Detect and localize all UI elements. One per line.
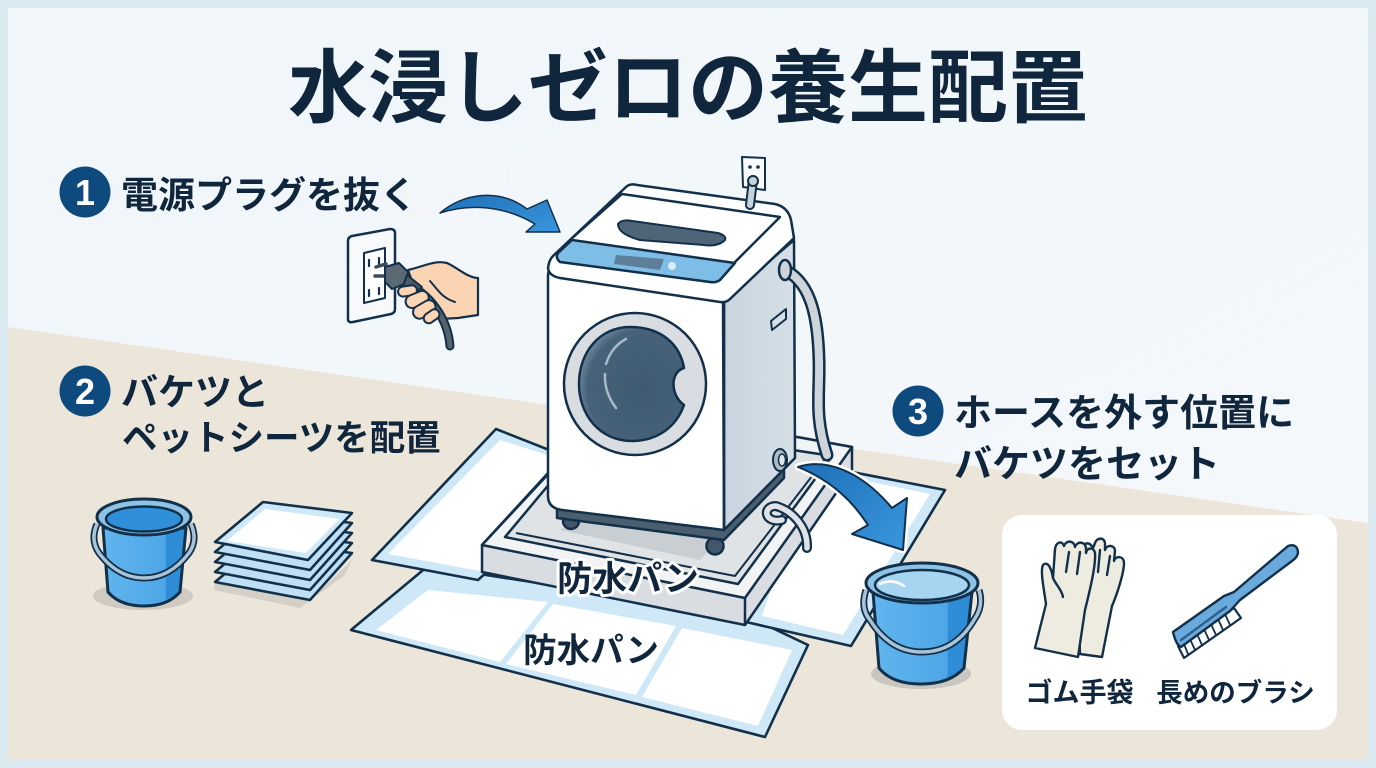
- step 2 label: バケツと: [121, 372, 269, 413]
- wall plug above washer: [742, 157, 765, 205]
- washer door: [564, 313, 706, 455]
- label: rubber gloves: ゴム手袋: [1026, 677, 1134, 708]
- step 2 label: ペットシーツを配置: [122, 418, 441, 458]
- waterproof pan: [482, 437, 852, 625]
- label: sheet: 防水パン: [523, 633, 659, 670]
- step 3 label: 3: [908, 391, 928, 432]
- step 1 label: 1: [75, 172, 95, 213]
- sheet: back left: [372, 429, 600, 580]
- drain outlet: [773, 449, 787, 471]
- step 2 label: [60, 366, 441, 458]
- loose hose: [767, 506, 807, 548]
- icon: stack of pet sheets: [214, 502, 352, 608]
- sheet: right: [746, 462, 945, 646]
- washer side panel: [724, 240, 795, 530]
- washer side vent: [771, 309, 786, 330]
- washer top: [548, 184, 794, 302]
- washer lid handle: [618, 220, 725, 245]
- arrow: hose to bucket: [798, 464, 907, 550]
- step 1 label: [60, 166, 417, 218]
- panel: tools: [1002, 515, 1337, 730]
- washer front panel: [548, 258, 724, 530]
- sheet: front with folds: [351, 566, 808, 737]
- step 3 label: [892, 386, 1294, 486]
- arrow: toward washer: [440, 195, 560, 232]
- icon: wall outlet with hand and plug: [348, 229, 478, 346]
- step 3 label: バケツをセット: [954, 444, 1220, 486]
- step 1 label: 電源プラグを抜く: [121, 175, 417, 216]
- icon: rubber gloves: [1035, 539, 1124, 657]
- label: long brush: 長めのブラシ: [1156, 678, 1315, 708]
- bucket: right with water: [864, 563, 981, 689]
- drain hose: [779, 260, 827, 455]
- icon: long brush: [1173, 545, 1298, 658]
- washer control band: [557, 240, 735, 282]
- bucket: left: [93, 499, 194, 610]
- background: floor: [8, 327, 1368, 760]
- title: 水浸しゼロの養生配置: [288, 44, 1088, 133]
- label: pan: 防水パン: [557, 560, 699, 599]
- washer base and feet: [557, 462, 784, 554]
- step 2 label: 2: [75, 371, 95, 412]
- washing machine: [548, 157, 827, 554]
- step 3 label: ホースを外す位置に: [954, 393, 1294, 435]
